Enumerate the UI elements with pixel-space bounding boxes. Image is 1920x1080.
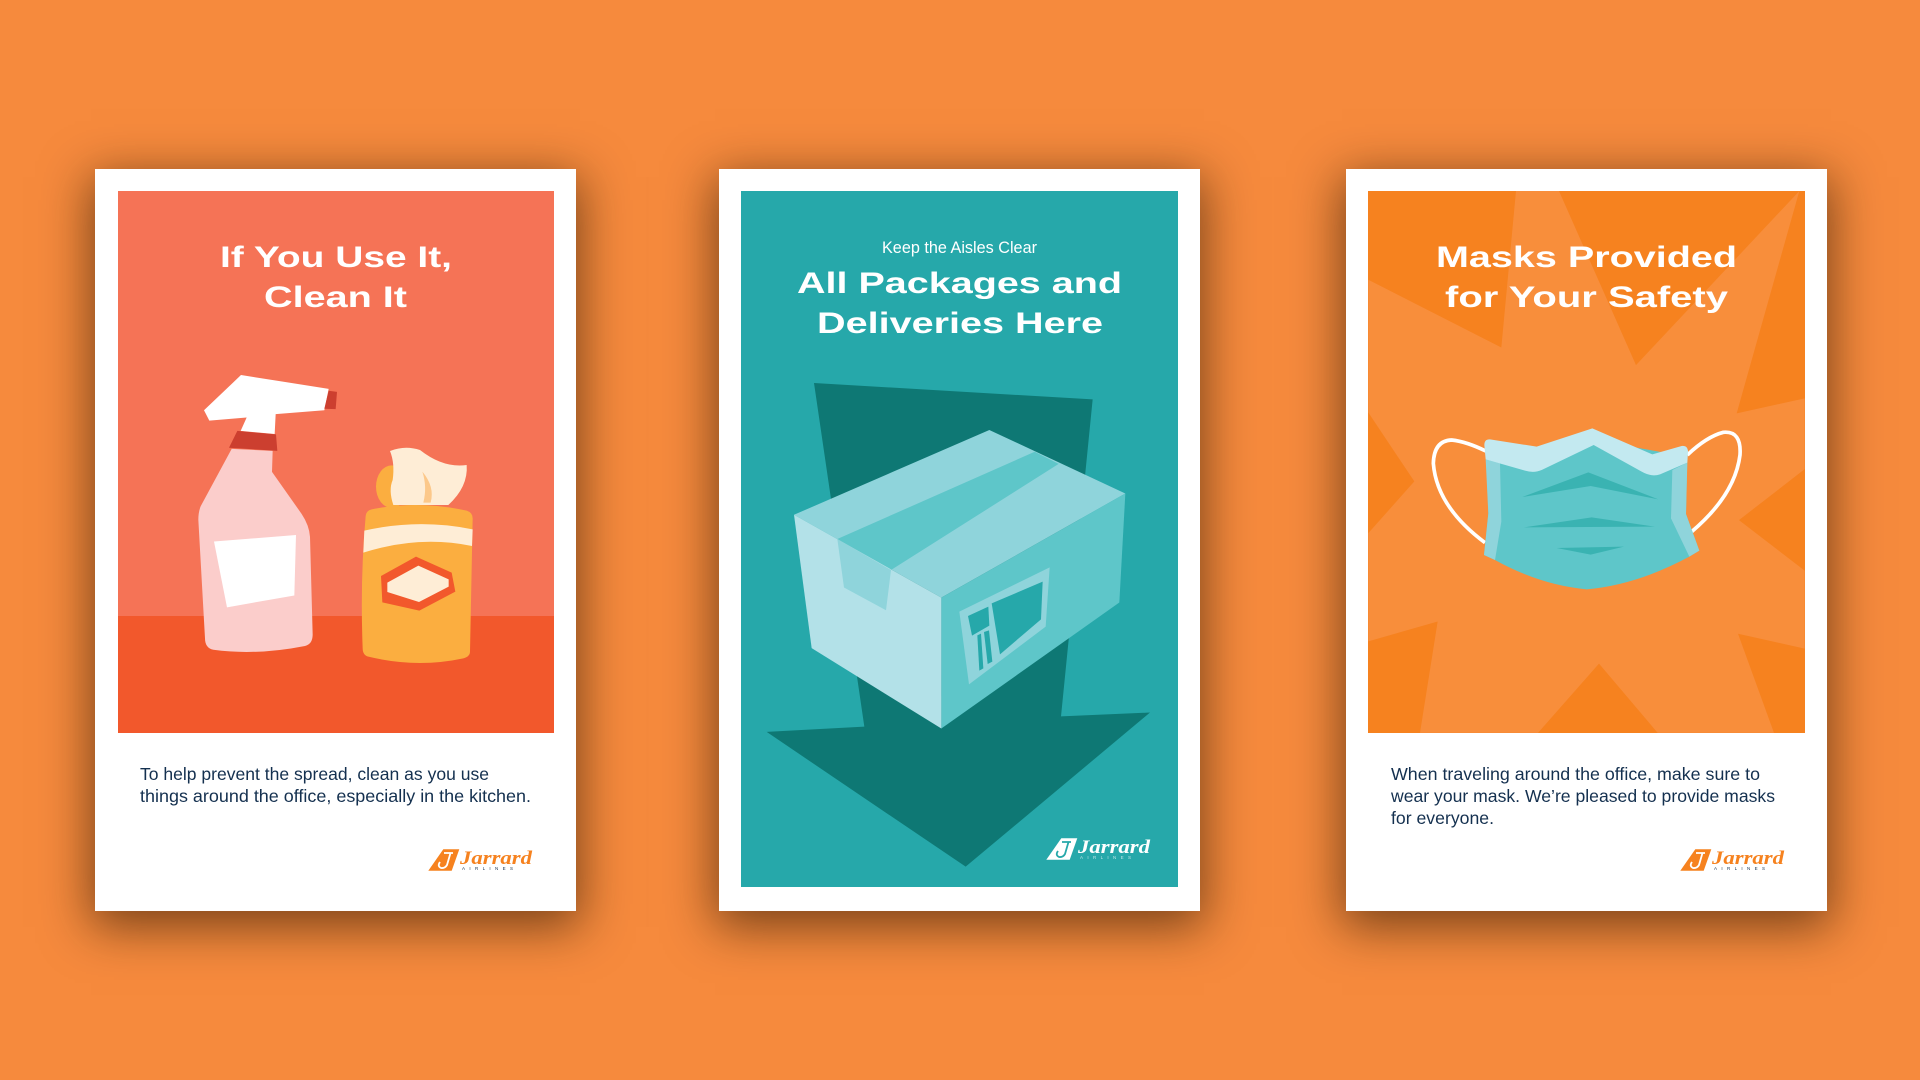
icon: face mask bbox=[1433, 428, 1740, 589]
icon: spray bottle bbox=[198, 375, 337, 652]
logo: Jarrard Airlines white: AIRLINES bbox=[1080, 855, 1131, 860]
logo: Jarrard Airlines: Jarrard bbox=[1711, 848, 1785, 869]
heading: If You Use It, Clean It bbox=[220, 241, 452, 314]
heading: All Packages and Deliveries Here: All Packages and bbox=[797, 267, 1122, 300]
heading: All Packages and Deliveries Here bbox=[797, 267, 1122, 340]
poster 3: masks provided bbox=[1346, 169, 1827, 911]
body text: To help prevent the spread, clean as you use bbox=[140, 764, 489, 784]
logo: Jarrard Airlines: AIRLINES bbox=[1714, 866, 1765, 871]
panel: coral background bbox=[118, 191, 554, 733]
body text: wear your mask. We’re pleased to provide masks bbox=[1390, 786, 1775, 806]
subheading: Keep the Aisles Clear: Keep the Aisles Clear bbox=[882, 238, 1037, 257]
arrow: down arrow bbox=[767, 383, 1150, 867]
heading: If You Use It, Clean It: Clean It bbox=[264, 281, 407, 314]
logo: Jarrard Airlines bbox=[1680, 848, 1785, 871]
poster 1: clean it bbox=[95, 169, 576, 911]
logo: Jarrard Airlines: AIRLINES bbox=[462, 866, 513, 871]
heading: If You Use It, Clean It: If You Use It, bbox=[220, 241, 452, 274]
body text: When traveling around the office, make sure to bbox=[1391, 764, 1760, 784]
logo: Jarrard Airlines bbox=[428, 848, 533, 871]
poster 2: packages and deliveries bbox=[719, 169, 1200, 911]
icon: wipes canister bbox=[362, 448, 473, 663]
heading: Masks Provided for Your Safety: Masks Provided bbox=[1436, 241, 1737, 274]
body text bbox=[140, 764, 531, 806]
panel: orange burst background bbox=[1368, 191, 1805, 733]
logo: Jarrard Airlines: Jarrard bbox=[459, 848, 533, 869]
heading: All Packages and Deliveries Here: Deliveries Here bbox=[817, 307, 1103, 340]
heading: Masks Provided for Your Safety bbox=[1436, 241, 1737, 314]
icon: cardboard box bbox=[794, 430, 1125, 729]
logo: Jarrard Airlines white bbox=[1046, 837, 1151, 860]
heading: Masks Provided for Your Safety: for Your Safety bbox=[1445, 281, 1728, 314]
logo: Jarrard Airlines white: Jarrard bbox=[1077, 837, 1151, 858]
body text bbox=[1390, 764, 1775, 828]
body text: things around the office, especially in the kitchen. bbox=[140, 786, 531, 806]
body text: for everyone. bbox=[1391, 808, 1494, 828]
panel: teal background bbox=[741, 191, 1178, 887]
